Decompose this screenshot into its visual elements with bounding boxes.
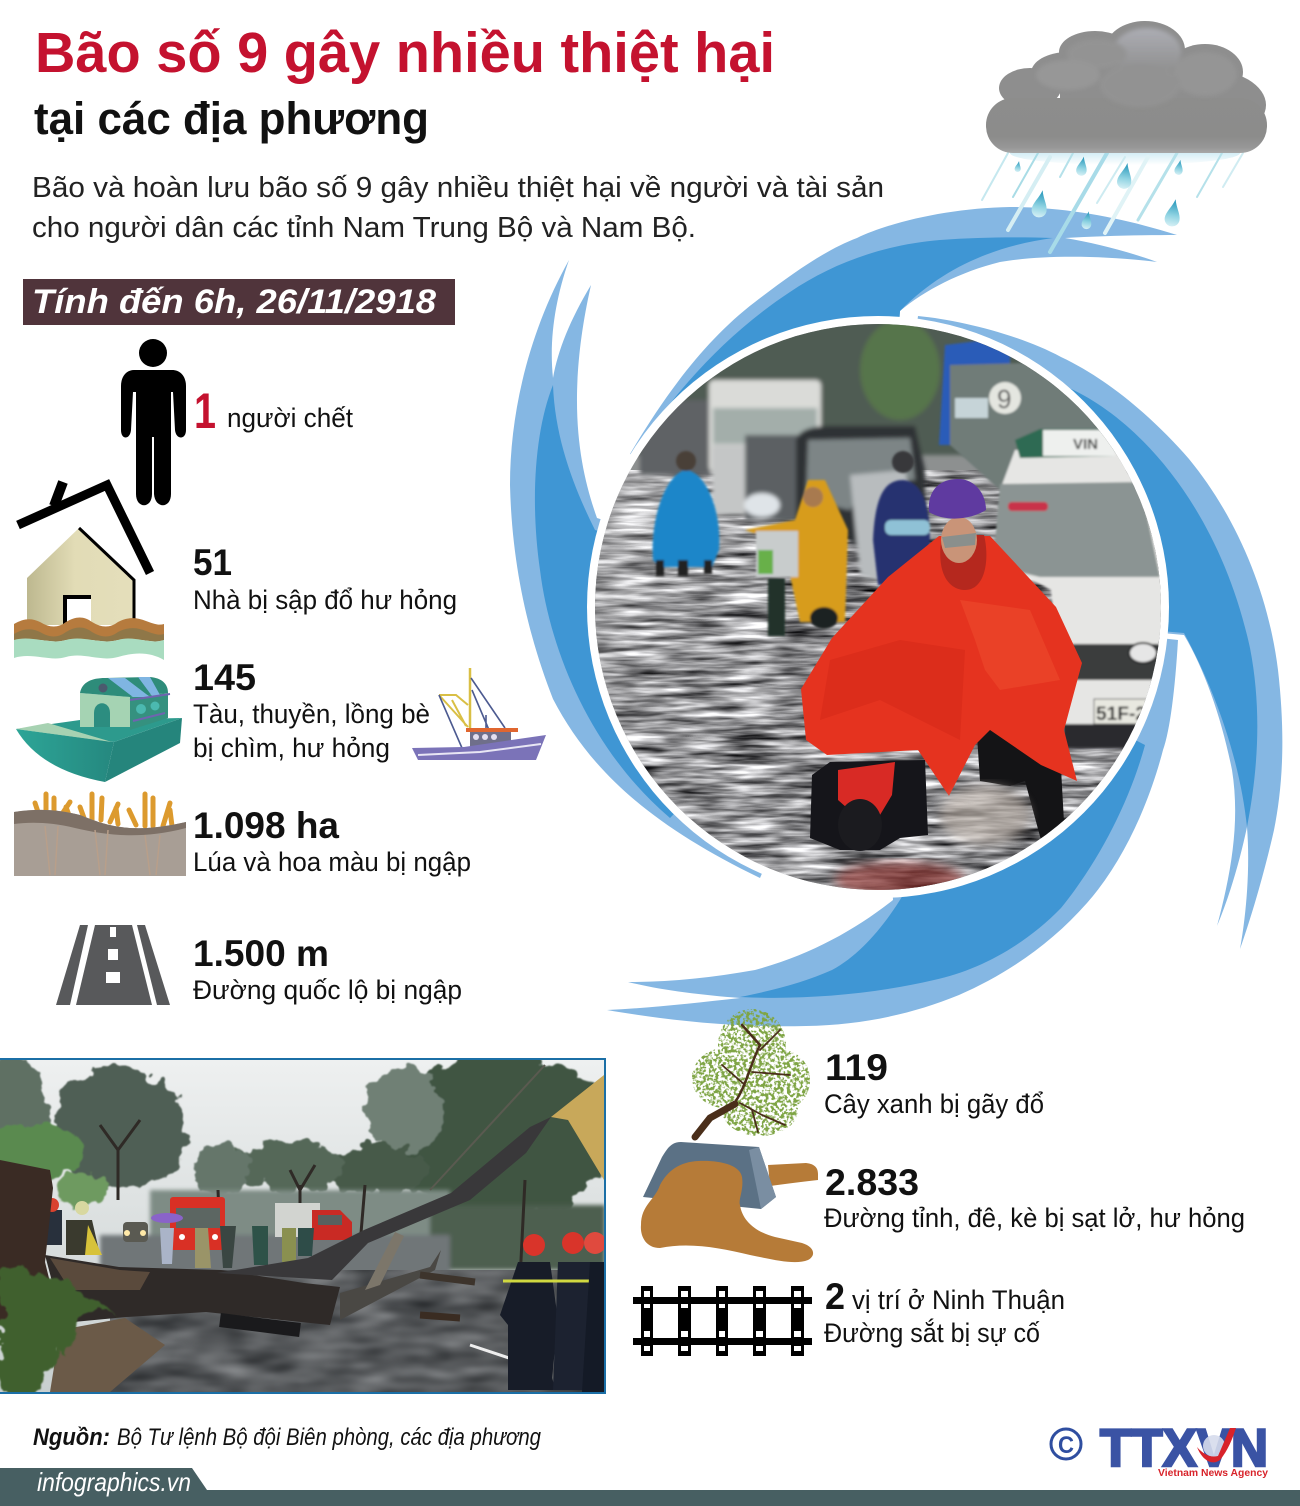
figure and label: 1.098 ha: [193, 805, 339, 846]
figure and label: 2: [825, 1276, 845, 1317]
logo: TTXVN: C: [1058, 1432, 1074, 1459]
rain cloud with falling drops: [982, 21, 1267, 252]
figure and label: [824, 1047, 1044, 1119]
photo: flooded street with motorbike riders: [590, 320, 1170, 900]
firefighters: [500, 1232, 606, 1392]
stat: 1 dead: [121, 339, 353, 505]
spiral arm: left: [510, 260, 878, 878]
figure and label: 145: [193, 657, 256, 698]
stat: 51 houses: [14, 482, 457, 660]
subtitle: tại các địa phương: [34, 93, 429, 144]
figure and label: Đường sắt bị sự cố: [824, 1317, 1040, 1348]
photo: flooded street with motorbike riders: 51F-2: [1096, 704, 1146, 725]
bystanders: [40, 1198, 314, 1268]
icon: house boat: [16, 677, 182, 782]
rain drops: [1014, 156, 1184, 230]
figure and label: Cây xanh bị gãy đổ: [824, 1089, 1044, 1119]
figure and label: [193, 542, 457, 615]
figure and label: 2.833: [825, 1162, 919, 1203]
figure and label: 51: [193, 542, 232, 583]
intro paragraph: Bão và hoàn lưu bão số 9 gây nhiều thiệt hại về người và tài sản: [32, 172, 884, 204]
figure and label: [193, 933, 462, 1005]
intro paragraph: cho người dân các tỉnh Nam Trung Bộ và Nam Bộ.: [32, 212, 696, 244]
taxi: [1001, 448, 1161, 733]
title: Bão số 9 gây nhiều thiệt hại: Bão số 9 gây nhiều thiệt hại: [35, 21, 775, 85]
navy rider: [873, 480, 930, 585]
icon: railway track: [633, 1286, 812, 1356]
icon: flooded house: [14, 482, 164, 660]
figure and label: [193, 657, 430, 763]
stat: 145 boats: [16, 657, 546, 782]
icon: road: [56, 925, 170, 1005]
footer bar: [0, 1467, 1300, 1506]
photo: fallen tree and firefighters: [0, 1053, 615, 1394]
figure and label: [824, 1276, 1065, 1348]
logo: TTXVN: Vietnam News Agency: [1158, 1467, 1268, 1479]
stat: 2.833 dykes: [641, 1142, 1245, 1262]
figure and label: 1.500 m: [193, 933, 329, 974]
icon: person: [121, 339, 186, 505]
stat: 119 trees: [692, 1009, 1044, 1137]
spiral arm: top: [630, 207, 1177, 607]
icon: broken tree: [692, 1009, 810, 1137]
date banner: Tính đến 6h, 26/11/2918: [32, 283, 436, 321]
spiral arm: right: [878, 316, 1282, 949]
blue poncho rider: [653, 470, 719, 567]
figure and label: 1: [194, 383, 216, 439]
icon: flooded rice field: [14, 794, 186, 876]
roadside dirt and fern: [0, 1269, 165, 1392]
figure and label: người chết: [227, 403, 353, 433]
logo: TTXVN: TTXVN: [1100, 1419, 1268, 1478]
figure and label: Nhà bị sập đổ hư hỏng: [193, 585, 457, 615]
motorcycle: [810, 760, 928, 850]
source line: Nguồn:: [33, 1424, 110, 1451]
stat: 1.098 ha crops: [14, 794, 471, 877]
figure and label: [193, 805, 471, 877]
rain streaks: [982, 141, 1243, 252]
figure and label: vị trí ở Ninh Thuận: [852, 1285, 1065, 1315]
figure and label: Tàu, thuyền, lồng bè: [193, 699, 430, 729]
icon: landslide road: [641, 1142, 818, 1262]
spiral arm: bottom: [607, 607, 1178, 1026]
main rider: [978, 730, 1064, 838]
intro paragraph: [32, 172, 884, 244]
stat: 1.500 m road: [56, 925, 462, 1005]
figure and label: Đường quốc lộ bị ngập: [193, 975, 462, 1005]
figure and label: Lúa và hoa màu bị ngập: [193, 847, 471, 877]
figure and label: [194, 383, 353, 439]
icon: fishing boat: [412, 668, 546, 760]
source line: Bộ Tư lệnh Bộ đội Biên phòng, các địa phương: [117, 1424, 542, 1451]
cloud body: [986, 21, 1267, 153]
figure and label: bị chìm, hư hỏng: [193, 733, 390, 763]
yellow poncho rider: [745, 480, 848, 622]
figure and label: Đường tỉnh, đê, kè bị sạt lở, hư hỏng: [824, 1203, 1245, 1233]
figure and label: 119: [825, 1047, 888, 1088]
trucks: [123, 1197, 352, 1250]
fallen tree: [0, 1065, 604, 1330]
stat: 2 railway sites: [633, 1276, 1065, 1356]
bus: [939, 337, 1010, 445]
photo: flooded street with motorbike riders: 9: [997, 384, 1011, 414]
photo: flooded street with motorbike riders: VIN: [1073, 436, 1098, 453]
storm spiral: [510, 207, 1282, 1026]
figure and label: [824, 1162, 1245, 1233]
footer bar: infographics.vn: [37, 1467, 191, 1497]
